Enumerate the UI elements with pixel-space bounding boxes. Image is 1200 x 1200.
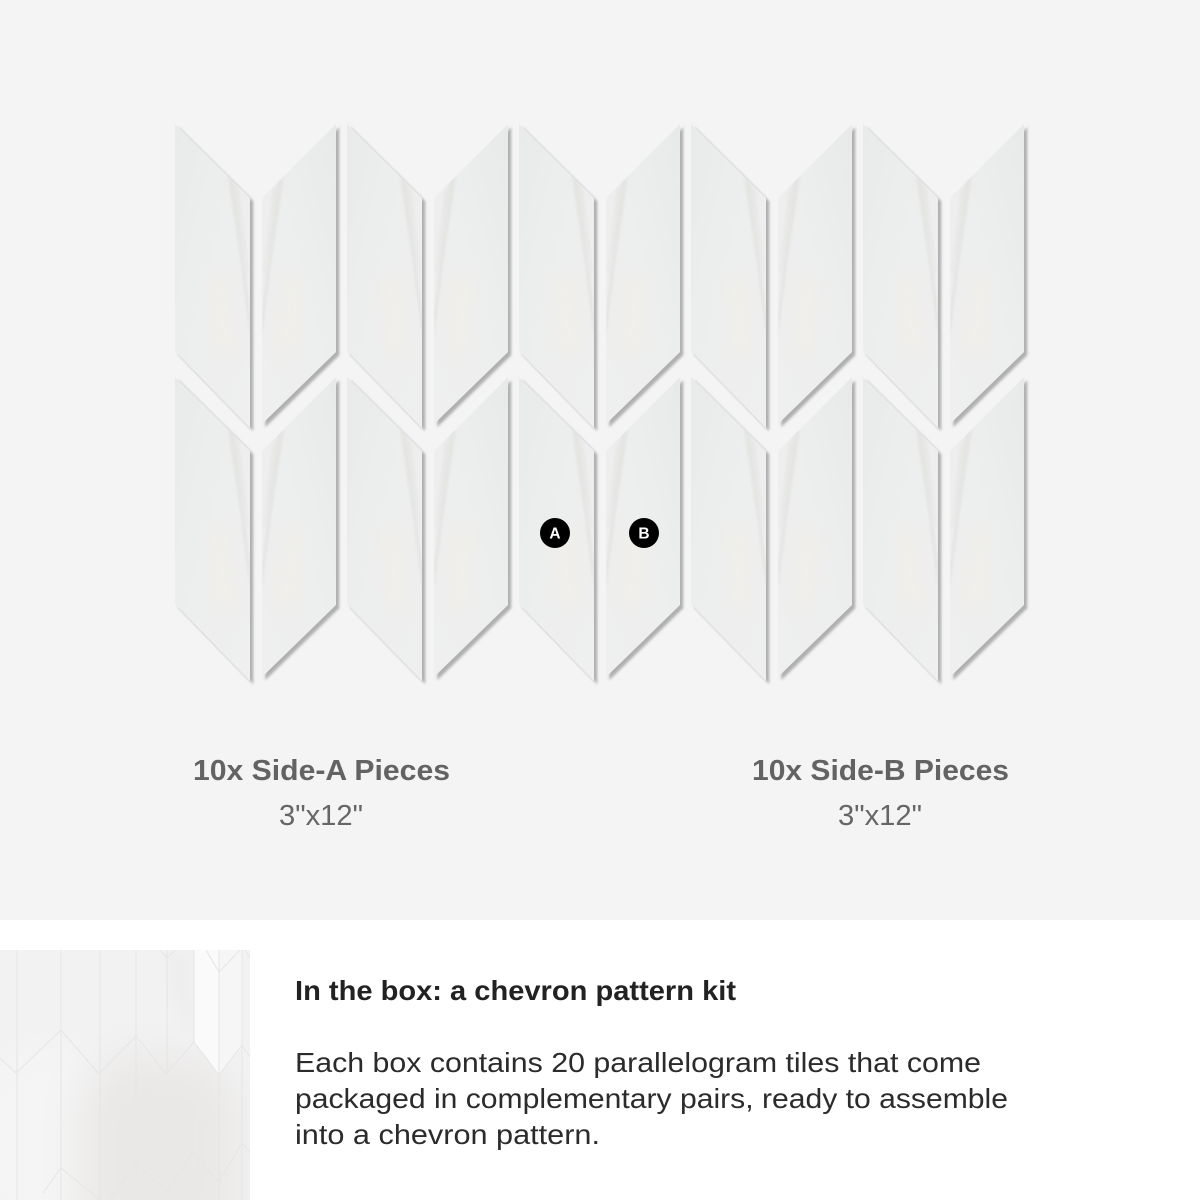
chevron tile layout — [175, 124, 1024, 681]
photo grout lines — [17, 950, 242, 1200]
tile pair top row 1 — [175, 124, 336, 428]
badge B: B — [638, 526, 650, 542]
label: side B pieces: 10x Side-B Pieces — [752, 755, 1009, 787]
bottom white panel — [0, 920, 1200, 1200]
tile pair bottom row 3 — [519, 377, 680, 681]
tile pair bottom row 2 — [347, 377, 508, 681]
tile pair top row 4 — [691, 124, 852, 428]
description text: packaged in complementary pairs, ready to assemble — [295, 1083, 1008, 1114]
description text: into a chevron pattern. — [295, 1119, 600, 1150]
label: side A pieces — [193, 755, 450, 832]
tile pair top row 5 — [863, 124, 1024, 428]
badge A — [540, 518, 570, 548]
tile pair top row 3 — [519, 124, 680, 428]
badge B — [629, 518, 659, 548]
label: side B pieces — [752, 755, 1009, 832]
label: side A pieces: 10x Side-A Pieces — [193, 755, 450, 787]
installed tile photo — [0, 950, 250, 1200]
heading: in the box: In the box: a chevron pattern kit — [295, 975, 736, 1006]
description text: Each box contains 20 parallelogram tiles that come — [295, 1047, 981, 1078]
label: side B pieces: 3"x12" — [838, 800, 922, 832]
tile pair bottom row 5 — [863, 377, 1024, 681]
tile pair top row 2 — [347, 124, 508, 428]
badge A: A — [549, 526, 561, 542]
label: side A pieces: 3"x12" — [279, 800, 363, 832]
tile pair bottom row 4 — [691, 377, 852, 681]
tile pair bottom row 1 — [175, 377, 336, 681]
description text — [295, 1047, 1008, 1150]
background panel — [0, 0, 1200, 920]
